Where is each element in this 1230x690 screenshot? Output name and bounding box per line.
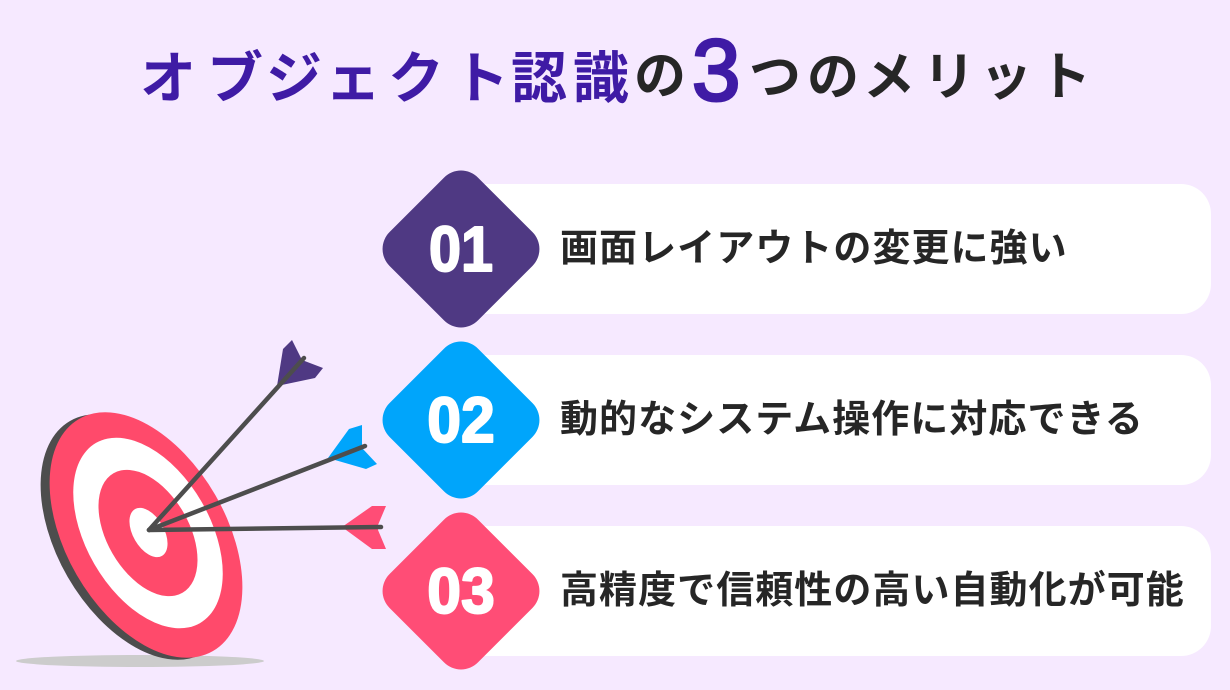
ground shadow	[16, 655, 264, 667]
title: の	[634, 48, 686, 106]
item 1	[373, 161, 1211, 337]
card 1	[440, 184, 1211, 314]
arrow: purple	[149, 340, 323, 530]
badge 1	[373, 161, 549, 337]
number 03: 03	[427, 556, 495, 627]
title: 3	[692, 22, 740, 119]
text 1: 画面レイアウトの変更に強い	[560, 228, 1068, 270]
number 01: 01	[429, 213, 493, 285]
title: オブジェクト認識	[140, 47, 629, 110]
arrow: pink	[149, 506, 386, 549]
card 3	[440, 526, 1211, 656]
target back edge	[1, 381, 273, 690]
target illustration	[1, 340, 386, 690]
target rings	[10, 379, 282, 690]
item 2	[373, 332, 1211, 508]
number 02: 02	[427, 385, 495, 456]
title	[140, 22, 1091, 119]
item 3	[373, 503, 1211, 679]
text 3: 高精度で信頼性の高い自動化が可能	[560, 570, 1185, 612]
text 2: 動的なシステム操作に対応できる	[560, 399, 1144, 441]
arrow: blue	[149, 425, 377, 530]
title: つのメリット	[749, 49, 1091, 107]
badge 2	[373, 332, 549, 508]
badge 3	[373, 503, 549, 679]
card 2	[440, 355, 1211, 485]
